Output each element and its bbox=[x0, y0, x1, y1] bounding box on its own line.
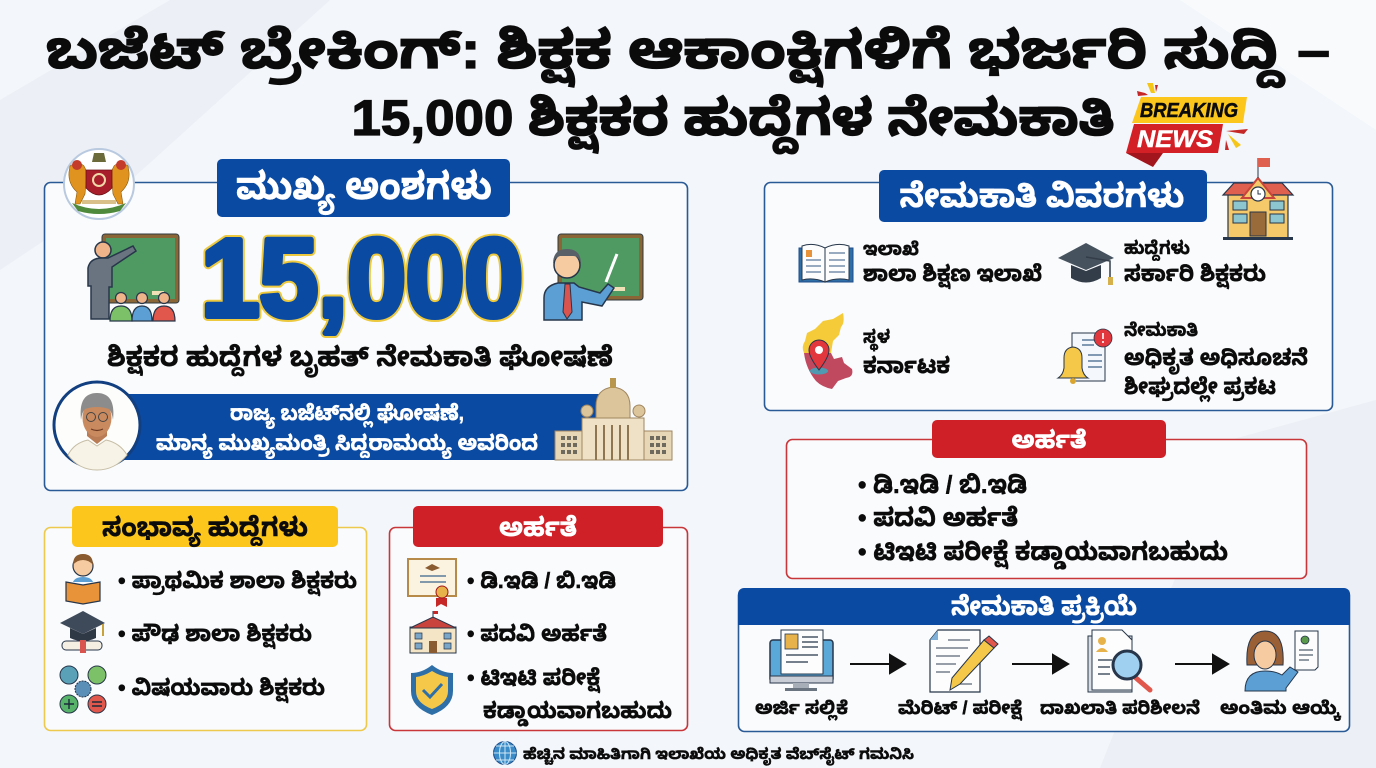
post list item 2: • ಪೌಢ ಶಾಲಾ ಶಿಕ್ಷಕರು bbox=[118, 621, 312, 650]
heading: recruitment process: ನೇಮಕಾತಿ ಪ್ರಕ್ರಿಯೆ bbox=[951, 591, 1137, 624]
announcement text: ಶಿಕ್ಷಕರ ಹುದ್ದೆಗಳ ಬೃಹತ್ ನೇಮಕಾತಿ ಘೋಷಣೆ bbox=[107, 342, 613, 377]
arrow bbox=[850, 655, 905, 673]
detail: notification: ನೇಮಕಾತಿ bbox=[1124, 320, 1198, 340]
icon: karnataka map pin bbox=[803, 313, 852, 389]
heading: key highlights bbox=[217, 159, 510, 217]
panel: recruitment process bbox=[738, 588, 1350, 732]
big number 15,000: 15,000 bbox=[201, 217, 523, 340]
detail: location: ಕರ್ನಾಟಕ bbox=[863, 353, 950, 378]
icon: school building bbox=[1223, 158, 1293, 240]
icon: cap and scroll bbox=[60, 611, 105, 653]
eligibility list bbox=[858, 471, 1228, 570]
heading: eligibility: ಅರ್ಹತೆ bbox=[499, 512, 577, 542]
banner: budget announcement bbox=[120, 394, 600, 460]
title: ಬಜೆಟ್ ಬ್ರೇಕಿಂಗ್: ಶಿಕ್ಷಕ ಆಕಾಂಕ್ಷಿಗಳಿಗೆ ಭರ್ಜರಿ ಸುದ್ದಿ – bbox=[46, 22, 1330, 88]
heading: possible posts: ಸಂಭಾವ್ಯ ಹುದ್ದೆಗಳು bbox=[102, 512, 308, 547]
heading: possible posts bbox=[72, 506, 338, 547]
icon: shield check bbox=[411, 665, 453, 715]
icon: document verification bbox=[1088, 630, 1150, 692]
icon: college building bbox=[410, 611, 456, 653]
panel: key highlights bbox=[44, 149, 688, 490]
footer note: ಹೆಚ್ಚಿನ ಮಾಹಿತಿಗಾಗಿ ಇಲಾಖೆಯ ಅಧಿಕೃತ ವೆಬ್‌ಸೈಟ್ ಗಮನಿಸಿ bbox=[523, 746, 914, 766]
eligibility list: • ಡಿ.ಇಡಿ / ಬಿ.ಇಡಿ bbox=[858, 471, 1027, 499]
banner: budget announcement: ರಾಜ್ಯ ಬಜೆಟ್‌ನಲ್ಲಿ ಘೋಷಣೆ, bbox=[230, 402, 464, 429]
step labels: ಮೆರಿಟ್ / ಪರೀಕ್ಷೆ bbox=[898, 698, 1023, 721]
heading: recruitment process bbox=[738, 588, 1350, 625]
heading: key highlights: ಮುಖ್ಯ ಅಂಶಗಳು bbox=[236, 166, 492, 215]
detail: notification: ಅಧಿಕೃತ ಅಧಿಸೂಚನೆ bbox=[1124, 345, 1308, 374]
icon: vidhana soudha bbox=[555, 378, 672, 460]
icon: teacher with pointer bbox=[544, 234, 643, 320]
icon: graduation cap bbox=[1058, 243, 1114, 285]
arrow bbox=[1012, 655, 1068, 673]
icon: subject symbols bbox=[60, 666, 106, 713]
panel: recruitment details bbox=[764, 158, 1332, 410]
big number 15,000: 15,000 bbox=[201, 217, 523, 340]
post list item 3: • ವಿಷಯವಾರು ಶಿಕ್ಷಕರು bbox=[118, 675, 325, 704]
step labels: ಅರ್ಜಿ ಸಲ್ಲಿಕೆ bbox=[755, 698, 848, 721]
footer note bbox=[494, 742, 914, 766]
step labels bbox=[755, 698, 1342, 721]
eligibility list: • ಟಿಇಟಿ ಪರೀಕ್ಷೆ ಕಡ್ಡಾಯವಾಗಬಹುದು bbox=[858, 538, 1228, 570]
detail: notification: ಶೀಘ್ರದಲ್ಲೇ ಪ್ರಕಟ bbox=[1124, 374, 1276, 403]
heading: recruitment details: ನೇಮಕಾತಿ ವಿವರಗಳು bbox=[900, 177, 1184, 214]
detail: notification bbox=[1124, 320, 1308, 403]
detail: department bbox=[863, 239, 1042, 290]
eligibility item 2: • ಪದವಿ ಅರ್ಹತೆ bbox=[467, 621, 607, 646]
icon: globe bbox=[494, 742, 516, 764]
post list item 1: • ಪ್ರಾಥಮಿಕ ಶಾಲಾ ಶಿಕ್ಷಕರು bbox=[118, 568, 357, 597]
heading: eligibility: ಅರ್ಹತೆ bbox=[1012, 427, 1086, 454]
icon: selected candidate bbox=[1245, 631, 1318, 691]
heading: eligibility bbox=[932, 420, 1166, 458]
icon: notification bell bbox=[1058, 329, 1112, 384]
detail: posts: ಸರ್ಕಾರಿ ಶಿಕ್ಷಕರು bbox=[1124, 261, 1266, 290]
eligibility list: • ಪದವಿ ಅರ್ಹತೆ bbox=[858, 504, 1018, 532]
title: 15,000 ಶಿಕ್ಷಕರ ಹುದ್ದೆಗಳ ನೇಮಕಾತಿ bbox=[352, 90, 1114, 154]
detail: posts bbox=[1124, 238, 1266, 290]
eligibility item 3: ಕಡ್ಡಾಯವಾಗಬಹುದು bbox=[483, 698, 672, 727]
heading: eligibility bbox=[413, 506, 663, 547]
heading: recruitment details bbox=[879, 170, 1207, 222]
panel: eligibility right bbox=[786, 420, 1306, 578]
detail: posts: ಹುದ್ದೆಗಳು bbox=[1124, 238, 1190, 261]
icon: student reading bbox=[66, 554, 100, 604]
portrait: chief minister bbox=[54, 382, 140, 470]
icon: certificate bbox=[408, 559, 456, 607]
icon: merit exam bbox=[930, 630, 998, 692]
arrow bbox=[1175, 655, 1228, 673]
detail: department: ಶಾಲಾ ಶಿಕ್ಷಣ ಇಲಾಖೆ bbox=[863, 261, 1042, 290]
icon: breaking news badge: BREAKING bbox=[1140, 100, 1238, 122]
panel: possible posts bbox=[44, 506, 366, 730]
step labels: ಅಂತಿಮ ಆಯ್ಕೆ bbox=[1220, 698, 1342, 721]
eligibility item 3 bbox=[467, 665, 672, 727]
eligibility item 3: • ಟಿಇಟಿ ಪರೀಕ್ಷೆ bbox=[467, 665, 600, 694]
detail: location bbox=[863, 327, 950, 378]
icon: breaking news badge bbox=[1126, 83, 1248, 167]
icon: state emblem bbox=[64, 149, 134, 219]
panel: eligibility left bbox=[390, 506, 688, 730]
icon: breaking news badge: NEWS bbox=[1137, 126, 1213, 153]
icon: open book bbox=[799, 244, 853, 282]
icon: computer application bbox=[770, 630, 833, 691]
icon: teacher with class bbox=[88, 234, 179, 321]
detail: department: ಇಲಾಖೆ bbox=[863, 239, 919, 259]
banner: budget announcement: ಮಾನ್ಯ ಮುಖ್ಯಮಂತ್ರಿ ಸಿದ್ದರಾಮಯ್ಯ ಅವರಿಂದ bbox=[156, 432, 538, 459]
title bbox=[46, 22, 1330, 154]
eligibility item 1: • ಡಿ.ಇಡಿ / ಬಿ.ಇಡಿ bbox=[467, 568, 616, 593]
step labels: ದಾಖಲಾತಿ ಪರಿಶೀಲನೆ bbox=[1040, 698, 1200, 718]
detail: location: ಸ್ಥಳ bbox=[863, 327, 890, 352]
